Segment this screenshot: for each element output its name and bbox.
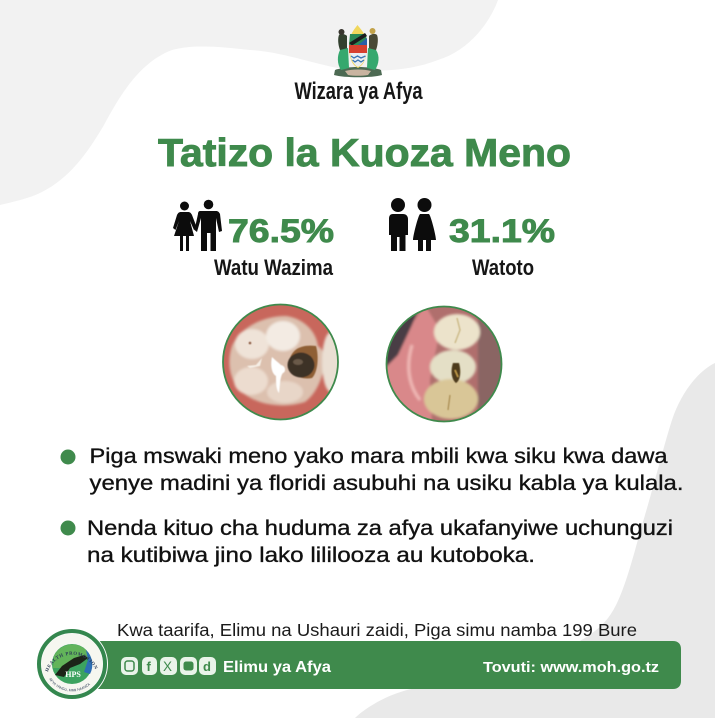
logo: health promotion section badge: [37, 629, 108, 699]
logo: health promotion section badge: AFYA YANGU, MIMI NAANZA: [49, 678, 90, 692]
percentage: 31.1%: [449, 213, 555, 249]
footer bar: [90, 641, 681, 689]
bullet 2: [60, 516, 679, 567]
bullet text: Piga mswaki meno yako mara mbili kwa siku kwa dawa: [90, 444, 668, 468]
logo: health promotion section badge: HPS: [65, 670, 81, 679]
percentage: 76.5%: [228, 213, 334, 249]
bullet text: yenye madini ya floridi asubuhi na usiku kabla ya kulala.: [90, 471, 684, 495]
right figure: [369, 34, 378, 52]
bullet dot: [60, 520, 76, 536]
social icons: d: [203, 659, 211, 674]
website: Tovuti: www.moh.go.tz: [483, 659, 659, 676]
icon: boy and girl: [389, 198, 436, 251]
left figure: [338, 34, 347, 52]
social icons: [121, 657, 216, 675]
stat: adults: [173, 200, 334, 280]
coat of arms emblem: [334, 25, 382, 77]
bullet text: Nenda kituo cha huduma za afya ukafanyiwe uchunguzi: [87, 516, 673, 540]
social icons: f: [146, 659, 152, 674]
hotline text: Kwa taarifa, Elimu na Ushauri zaidi, Piga simu namba 199 Bure: [117, 620, 637, 640]
title: Tatizo la Kuoza Meno: [158, 132, 571, 175]
stat: children: [389, 198, 555, 280]
bullet dot: [60, 450, 76, 464]
social icons: X: [163, 659, 172, 674]
photo: decayed teeth row: [385, 305, 503, 425]
label: Watoto: [472, 255, 534, 280]
base: [334, 67, 382, 77]
logo: health promotion section badge: HEALTH PROMOTION SECTION: [45, 652, 98, 672]
photo: decayed molar: [222, 303, 340, 421]
ministry name: Wizara ya Afya: [294, 78, 423, 105]
label: Watu Wazima: [214, 255, 333, 280]
bullet 1: [60, 444, 684, 495]
bullet text: na kutibiwa jino lako lililooza au kutoboka.: [87, 543, 535, 567]
shield: [349, 25, 367, 68]
footer label: Elimu ya Afya: [223, 659, 331, 676]
icon: man and woman: [173, 200, 222, 251]
